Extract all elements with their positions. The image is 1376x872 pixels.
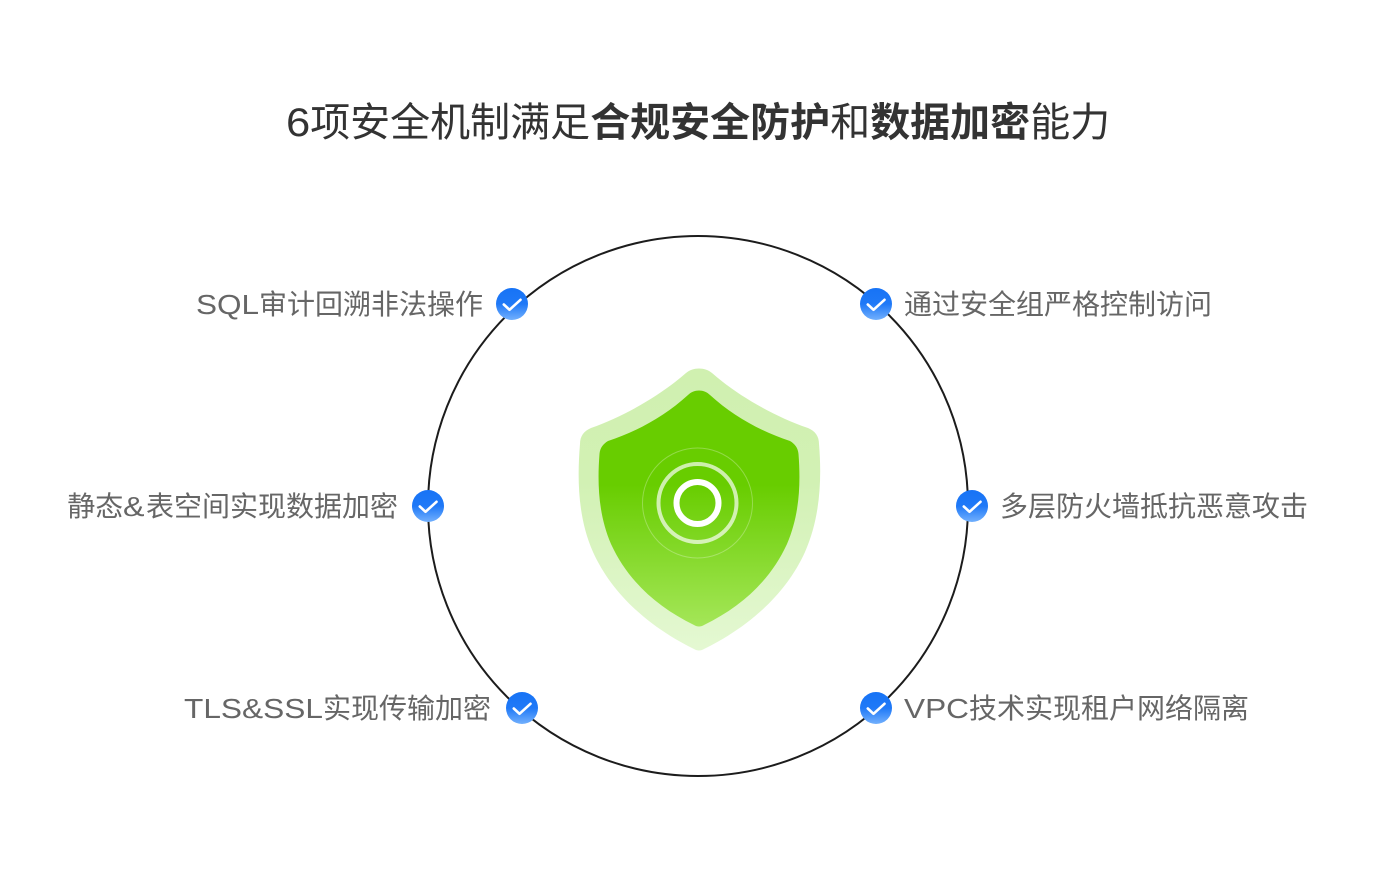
label: VPC: 技术实现租户网络隔离 — [969, 693, 1249, 724]
label: SQL audit: SQL — [196, 289, 259, 320]
shield rings — [642, 448, 752, 558]
large circle — [428, 236, 968, 776]
title: 6 — [286, 101, 310, 145]
icon: check static encryption — [412, 490, 444, 522]
label: static encryption: 静态 表空间实现数据加密 — [67, 491, 398, 522]
label: VPC: VPC — [904, 693, 969, 724]
icon: check security group — [860, 288, 892, 320]
icon: shield — [579, 368, 820, 650]
label: security group: 通过安全组严格控制访问 — [904, 289, 1212, 320]
shield inner — [599, 390, 799, 626]
label: TLS SSL: TLS&SSL — [184, 693, 323, 724]
icon: check firewall — [956, 490, 988, 522]
title: 项安全机制满足合规安全防护和数据加密能力 — [310, 101, 1110, 145]
label: firewall: 多层防火墙抵抗恶意攻击 — [1000, 491, 1308, 522]
label: static encryption: & — [123, 491, 145, 522]
label: TLS SSL: 实现传输加密 — [323, 693, 491, 724]
icon: check VPC — [860, 692, 892, 724]
label: TLS SSL — [184, 693, 491, 724]
label: SQL audit: 审计回溯非法操作 — [259, 289, 483, 320]
icon: check TLS — [506, 692, 538, 724]
shield outer — [579, 368, 820, 650]
icon: check SQL — [496, 288, 528, 320]
